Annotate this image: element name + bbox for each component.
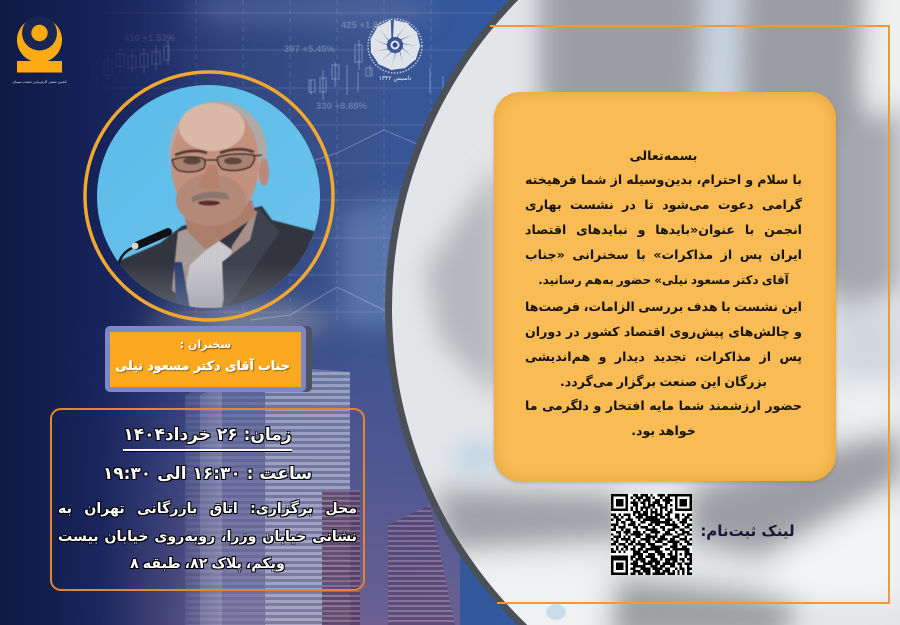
- right light panel: [385, 0, 900, 625]
- letter body: خواهد بود.: [631, 423, 696, 438]
- person: [118, 100, 314, 308]
- invitation letter panel: [494, 92, 836, 481]
- letter body: بزرگان این صنعت برگزار می‌گردد.: [560, 374, 767, 389]
- letter body: گرامی دعوت می‌شود تا در نشست بهاری: [525, 197, 802, 212]
- letter body: [525, 172, 802, 438]
- chart labels: 425 +1.8%: [341, 20, 387, 31]
- logo: crescent emblem: انجمن صنفی کارفرمایی صنعت سیمان: [13, 80, 67, 84]
- microphone: [118, 232, 168, 267]
- candlestick chart: [92, 40, 443, 100]
- letter body: پس از مذاکرات، تجدید دیدار و هم‌اندیشی: [525, 349, 802, 364]
- blurred office photo: [425, 0, 900, 625]
- speaker label: سخنران :: [180, 338, 231, 351]
- face: [170, 103, 260, 206]
- logo: chamber of commerce pinwheel: تاسیس ۱۳۴۲: [379, 75, 412, 82]
- letter body: حضور ارزشمند شما مایه افتخار و دلگرمی ما: [525, 398, 802, 413]
- chart line: [300, 130, 450, 165]
- letter body: این نشست با هدف بررسی الزامات، فرصت‌ها: [525, 299, 802, 314]
- soft light patches: [140, 0, 440, 344]
- letter body: ایران پس از مذاکرات» با سخنرانی «جناب: [525, 247, 802, 262]
- venue: محل برگزاری: اتاق بازرگانی تهران به: [58, 501, 357, 517]
- logo: chamber of commerce pinwheel: [368, 17, 423, 82]
- chart grid lines: [90, 0, 560, 320]
- date: زمان: ۲۶ خرداد۱۴۰۴: [123, 425, 292, 445]
- neck: [182, 200, 256, 250]
- chart labels: 330 +8.88%: [316, 101, 368, 112]
- logo: crescent emblem: [13, 16, 67, 84]
- venue: [58, 499, 357, 572]
- nose: [198, 165, 220, 190]
- speaker box backing: [105, 326, 312, 392]
- chart labels: [124, 20, 387, 112]
- left dark blue panel: [0, 0, 560, 625]
- QR code: [611, 494, 692, 575]
- letter body: انجمن با عنوان«بایدها و نبایدهای اقتصاد: [525, 222, 802, 237]
- venue: نشانی خیابان وزرا، روبه‌روی خیابان بیست: [58, 529, 357, 545]
- letter body: و چالش‌های پیش‌روی اقتصاد کشور در دوران: [525, 324, 802, 339]
- letter body: با سلام و احترام، بدین‌وسیله از شما فرهیخته: [525, 172, 802, 187]
- buildings skyline: [0, 0, 460, 625]
- chart labels: 397 +5.45%: [284, 44, 336, 55]
- greeting: بسمه‌تعالی: [630, 148, 697, 163]
- registration link label: لینک ثبت‌نام:: [700, 522, 795, 540]
- hair: [168, 100, 268, 184]
- speaker caption: [115, 338, 290, 375]
- event details box: [50, 408, 365, 591]
- venue: ویکم، پلاک ۸۲، طبقه ۸: [130, 556, 285, 572]
- time: ساعت : ۱۶:۳۰ الی ۱۹:۳۰: [103, 464, 312, 484]
- speaker photo: [85, 72, 333, 320]
- glasses: [172, 154, 262, 172]
- orange thin frame: [490, 26, 889, 603]
- letter body: آقای دکتر مسعود نیلی» حضور به‌هم رسانید.: [538, 273, 789, 287]
- eyebrows and eyes: [175, 149, 254, 155]
- speaker name: جناب آقای دکتر مسعود نیلی: [115, 358, 290, 373]
- mustache and mouth: [192, 192, 230, 202]
- chart labels: 410 +1.53%: [124, 33, 176, 44]
